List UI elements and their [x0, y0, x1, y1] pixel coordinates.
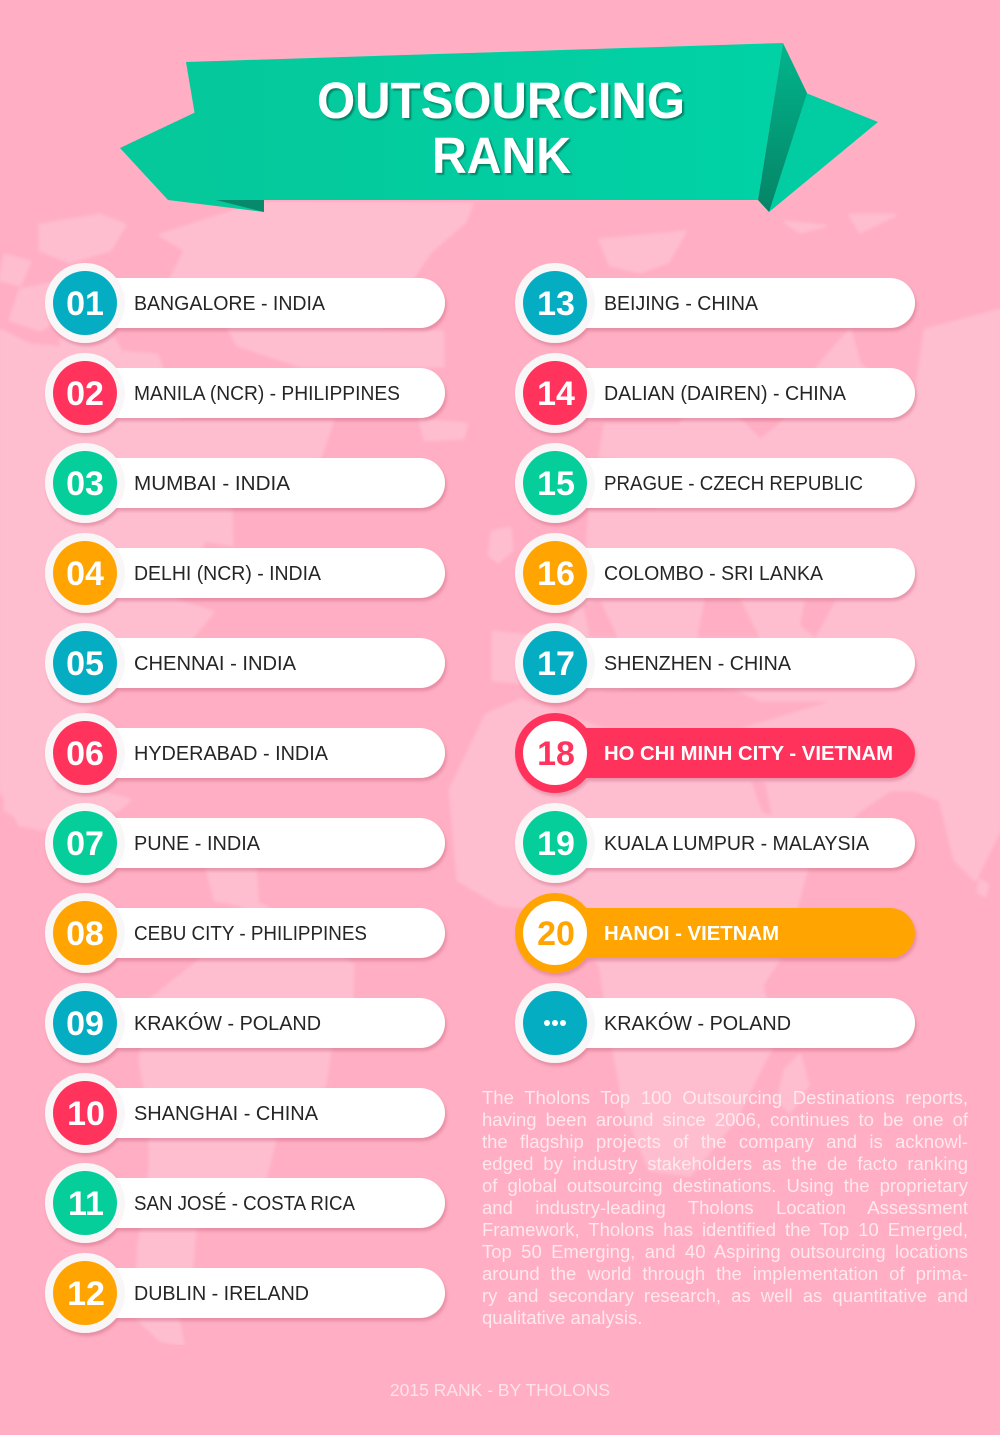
rank 03: 03 — [66, 465, 104, 503]
rank 01: 01 — [66, 285, 104, 323]
rank 15 — [515, 443, 915, 523]
rank 15: PRAGUE - CZECH REPUBLIC — [604, 473, 863, 495]
rank 07 — [45, 803, 445, 883]
map: Madagascar — [778, 1055, 808, 1112]
map: South America — [137, 905, 353, 1345]
world map background — [0, 202, 1000, 1345]
rank 02: 02 — [66, 375, 104, 413]
ribbon: left tail — [120, 112, 264, 212]
title ribbon — [120, 43, 878, 212]
rank continuation with dots — [515, 983, 915, 1063]
rank 14: 14 — [537, 375, 575, 413]
rank 11: 11 — [68, 1185, 104, 1223]
map: Europe and Asia — [493, 310, 1000, 880]
rank 06: HYDERABAD - INDIA — [134, 743, 329, 765]
rank 18 highlighted: HO CHI MINH CITY - VIETNAM — [604, 743, 893, 765]
sea: Mediterranean — [604, 690, 736, 728]
rank 16 — [515, 533, 915, 613]
title: outsourcing rank: RANK — [432, 127, 571, 184]
description paragraph: The Tholons Top 100 Outsourcing Destinations reports, — [482, 1087, 968, 1108]
description paragraph: ry and secondary research, as well as quantitative and — [482, 1285, 968, 1306]
rank 16: COLOMBO - SRI LANKA — [604, 563, 824, 585]
description paragraph: Top 50 Emerging, and 40 Aspiring outsourcing locations — [482, 1241, 968, 1262]
rank 10: 10 — [67, 1095, 105, 1133]
sea: Red Sea — [751, 780, 772, 815]
description paragraph — [482, 1087, 968, 1328]
map: Greenland and arctic — [160, 202, 472, 366]
rank 04: 04 — [66, 555, 104, 593]
rank 02: MANILA (NCR) - PHILIPPINES — [134, 383, 400, 405]
rank 13 — [515, 263, 915, 343]
description paragraph: of global outsourcing destinations. Using the proprietary — [482, 1175, 968, 1196]
rank 17: SHENZHEN - CHINA — [604, 653, 792, 675]
footer credit: 2015 RANK - BY THOLONS — [390, 1380, 610, 1400]
title: outsourcing rank: OUTSOURCING — [317, 72, 685, 129]
map: North America — [0, 330, 333, 830]
rank 08: 08 — [66, 915, 104, 953]
rank 13: 13 — [537, 285, 575, 323]
sea: European gulfs — [583, 598, 836, 638]
rank 05: CHENNAI - INDIA — [134, 653, 297, 675]
rank 07: 07 — [66, 825, 104, 863]
rank 20 highlighted: 20 — [537, 915, 575, 953]
description paragraph: the flagship projects of the company and is acknowl- — [482, 1131, 968, 1152]
rank 19: 19 — [537, 825, 575, 863]
rank 05 — [45, 623, 445, 703]
rank 09: 09 — [66, 1005, 104, 1043]
ribbon: left fold shadow — [216, 200, 264, 212]
rank 03 — [45, 443, 445, 523]
ribbon: right fold — [758, 43, 807, 212]
title: outsourcing rank — [317, 72, 685, 184]
rank 20 highlighted: HANOI - VIETNAM — [604, 923, 779, 945]
rank 14: DALIAN (DAIREN) - CHINA — [604, 383, 847, 405]
rank 01: BANGALORE - INDIA — [134, 293, 326, 315]
rank 08: CEBU CITY - PHILIPPINES — [134, 923, 367, 945]
rank 06 — [45, 713, 445, 793]
rank 16: 16 — [537, 555, 575, 593]
description paragraph: around the world through the implementation of prima- — [482, 1263, 968, 1284]
rank 11 — [45, 1163, 445, 1243]
rank 11: SAN JOSÉ - COSTA RICA — [134, 1192, 356, 1215]
ribbon: right tail — [760, 93, 878, 212]
description paragraph: Framework, Tholons has identified the Top 10 Emerged, — [482, 1219, 968, 1240]
rank 19 — [515, 803, 915, 883]
map: United Kingdom — [489, 528, 512, 562]
rank 10: SHANGHAI - CHINA — [134, 1103, 319, 1125]
rank 15: 15 — [537, 465, 575, 503]
rank 18 highlighted — [515, 713, 915, 793]
rank 13: BEIJING - CHINA — [604, 293, 759, 315]
rank 14 — [515, 353, 915, 433]
rank continuation with dots: KRAKÓW - POLAND — [604, 1012, 791, 1035]
rank 09: KRAKÓW - POLAND — [134, 1012, 321, 1035]
rank 01 — [45, 263, 445, 343]
rank 18 highlighted: 18 — [537, 735, 575, 773]
description paragraph: having been around since 2006, continues to be one of — [482, 1109, 968, 1130]
map: Sri Lanka and islands — [600, 215, 988, 896]
rank 05: 05 — [66, 645, 104, 683]
rank 19: KUALA LUMPUR - MALAYSIA — [604, 833, 870, 855]
rank 03: MUMBAI - INDIA — [134, 473, 291, 495]
rank 04 — [45, 533, 445, 613]
rank 04: DELHI (NCR) - INDIA — [134, 563, 322, 585]
rank 12: DUBLIN - IRELAND — [134, 1283, 309, 1305]
rank 02 — [45, 353, 445, 433]
rank 07: PUNE - INDIA — [134, 833, 261, 855]
rank 10 — [45, 1073, 445, 1153]
description paragraph: and industry-leading Tholons Location Assessment — [482, 1197, 968, 1218]
ribbon: main banner — [186, 43, 783, 200]
rank 09 — [45, 983, 445, 1063]
map: Central America — [5, 770, 258, 908]
rank 06: 06 — [66, 735, 104, 773]
rank 17: 17 — [537, 645, 575, 683]
rank 08 — [45, 893, 445, 973]
rank 20 highlighted — [515, 893, 915, 973]
description paragraph: edged by industry stakeholders as the de facto ranking — [482, 1153, 968, 1174]
rank 17 — [515, 623, 915, 703]
rank 12 — [45, 1253, 445, 1333]
map: Africa and Arabia — [450, 700, 890, 1175]
description paragraph: qualitative analysis. — [482, 1307, 642, 1328]
seas cut out of the map — [583, 598, 836, 815]
rank 12: 12 — [67, 1275, 105, 1313]
